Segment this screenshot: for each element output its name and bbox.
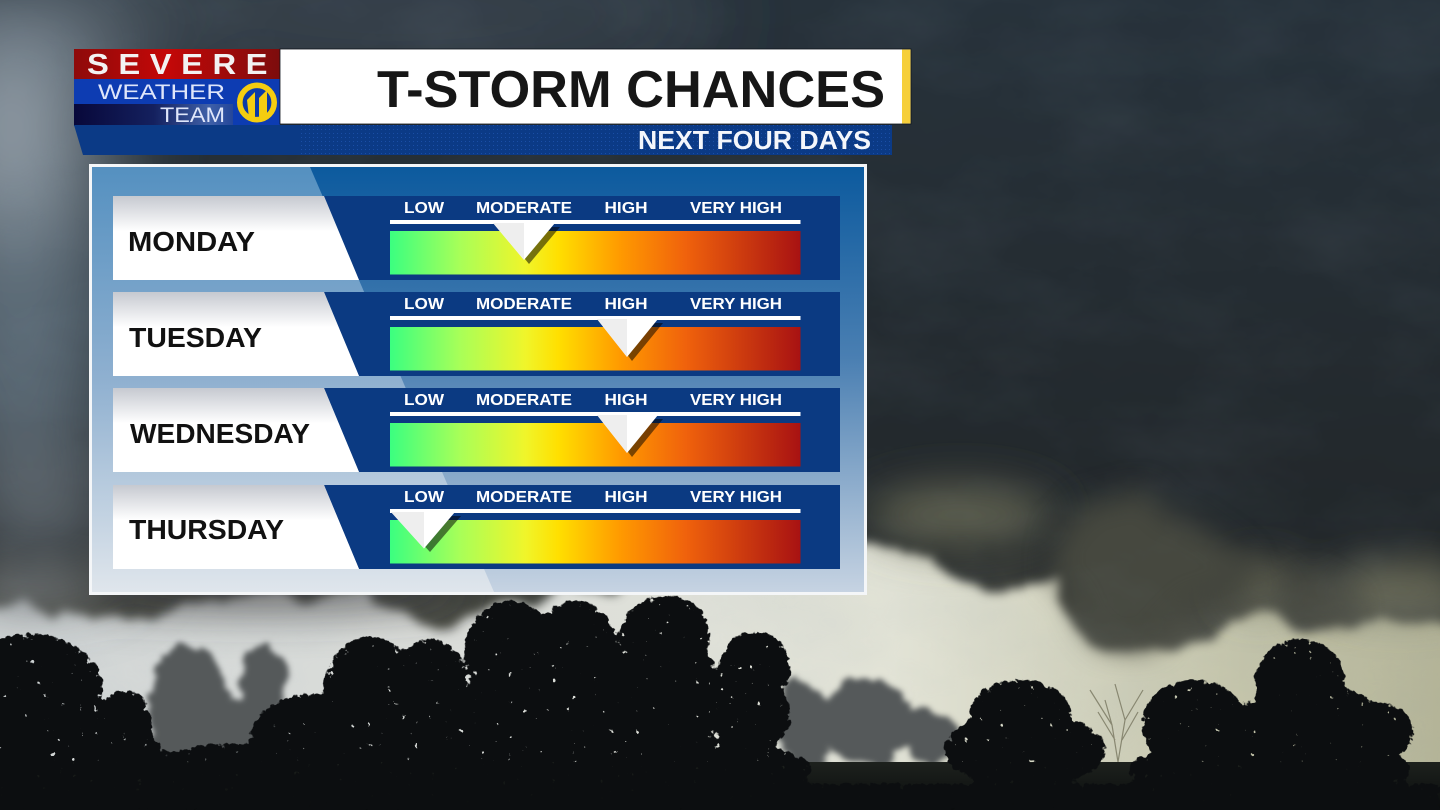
scale labels: LOW <box>404 200 444 217</box>
ground strip <box>0 762 1440 810</box>
subtitle bar <box>74 125 892 155</box>
row: Tuesday <box>113 292 840 376</box>
scale labels: VERY HIGH <box>690 296 782 313</box>
foreground tree silhouettes <box>0 597 1440 810</box>
scale labels: MODERATE <box>476 296 572 313</box>
distant tree silhouettes <box>150 645 956 770</box>
scale labels: MODERATE <box>476 392 572 409</box>
scale labels: LOW <box>404 392 444 409</box>
gradient bar <box>390 231 800 274</box>
pointer: high <box>597 319 663 361</box>
row: Thursday <box>113 485 840 569</box>
gradient bar <box>390 520 800 564</box>
title bar <box>280 49 911 124</box>
title text: T-STORM CHANCES <box>377 61 885 119</box>
scale labels: LOW <box>404 489 444 506</box>
logo word: TEAM: TEAM <box>160 104 225 127</box>
bare tree <box>1090 684 1143 762</box>
scale labels: VERY HIGH <box>690 489 782 506</box>
accent: yellow edge <box>902 50 910 124</box>
day label: TUESDAY <box>129 322 262 353</box>
pointer: low <box>391 512 461 552</box>
day label: THURSDAY <box>129 514 284 545</box>
scale labels <box>404 200 782 217</box>
scale labels: LOW <box>404 296 444 313</box>
scale labels <box>404 489 782 506</box>
scale labels: HIGH <box>604 296 648 313</box>
scale labels: MODERATE <box>476 489 572 506</box>
panel: daily chances <box>90 166 866 594</box>
row: Monday <box>113 196 840 280</box>
scale labels: HIGH <box>604 392 648 409</box>
header logo: Severe Weather Team <box>74 48 280 127</box>
day label: WEDNESDAY <box>130 418 310 449</box>
scale labels <box>404 296 782 313</box>
pointer: high <box>597 415 663 457</box>
pointer: moderate <box>493 223 560 264</box>
scale labels: MODERATE <box>476 200 572 217</box>
logo word: SEVERE: SEVERE <box>87 48 268 80</box>
day label: MONDAY <box>128 226 255 257</box>
row: Wednesday <box>113 388 840 472</box>
scale labels: HIGH <box>604 489 648 506</box>
icon: channel 11 logo <box>240 85 274 121</box>
scale labels: VERY HIGH <box>690 392 782 409</box>
scale labels: VERY HIGH <box>690 200 782 217</box>
subtitle text: NEXT FOUR DAYS <box>638 125 871 155</box>
scale labels: HIGH <box>604 200 648 217</box>
gradient bar <box>390 327 800 370</box>
logo word: WEATHER: WEATHER <box>98 81 225 104</box>
gradient bar <box>390 423 800 466</box>
scale labels <box>404 392 782 409</box>
